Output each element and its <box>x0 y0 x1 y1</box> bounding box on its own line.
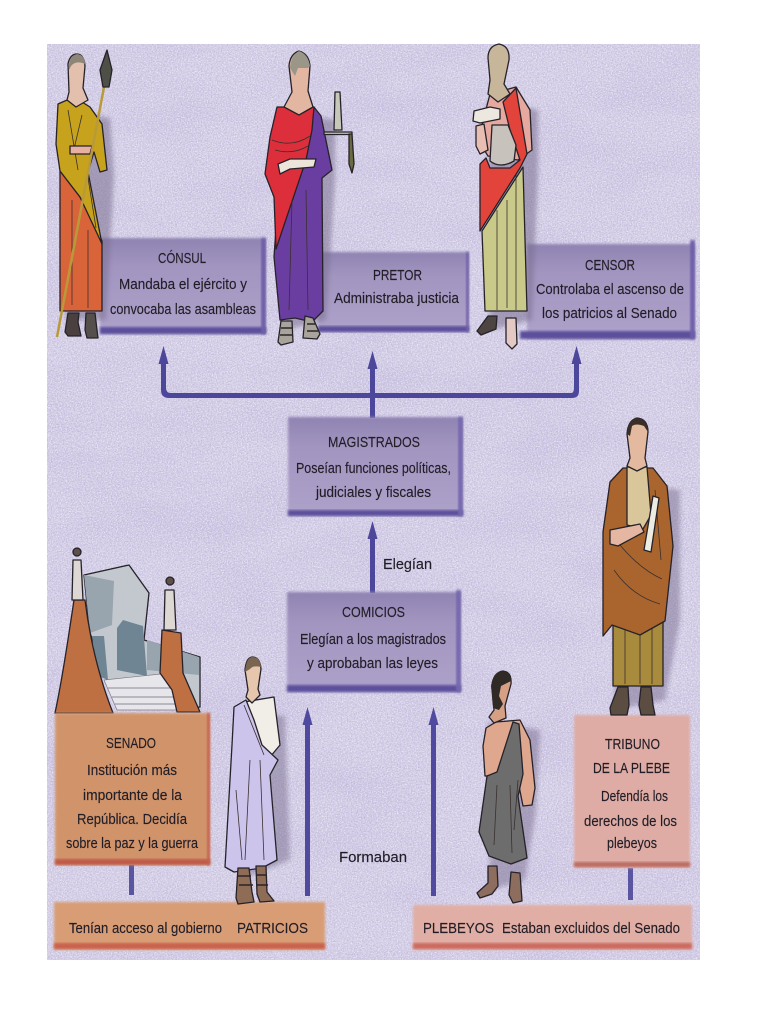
text: comicios: Elegían a los magistrados <box>300 631 446 648</box>
panel: patricios <box>54 902 325 950</box>
text: tribuno: DE LA PLEBE <box>593 760 670 777</box>
figure: cónsul <box>56 50 114 338</box>
panel: magistrados <box>288 417 463 516</box>
arrows: bracket from Magistrados to the three magistracies <box>158 346 582 418</box>
panel: plebeyos <box>413 905 692 950</box>
text: magistrados <box>296 434 451 501</box>
text: plebeyos <box>423 920 680 937</box>
text: patricios: Tenían acceso al gobierno <box>69 920 222 937</box>
text: magistrados: judiciales y fiscales <box>315 484 431 501</box>
text: senado <box>66 735 199 852</box>
text: senado: sobre la paz y la guerra <box>66 835 199 852</box>
text: tribuno <box>584 736 677 852</box>
text: pretor: Administraba justicia <box>334 290 460 307</box>
text: censor: CENSOR <box>585 257 635 274</box>
text: senado: Institución más <box>87 762 177 779</box>
text: pretor <box>334 267 460 307</box>
background panel <box>47 44 700 960</box>
figure: patricio <box>225 657 290 904</box>
text: magistrados: Poseían funciones políticas, <box>296 460 451 477</box>
text: comicios: COMICIOS <box>342 604 405 621</box>
panel: pretor <box>318 252 469 332</box>
panel: senado <box>55 713 210 865</box>
arrow: plebeyos to comicios <box>428 707 438 896</box>
connector: tribuno to plebeyos <box>628 868 633 900</box>
text: tribuno: plebeyos <box>607 835 657 852</box>
figure: censor <box>473 44 538 349</box>
arrow: Elegían <box>368 521 378 593</box>
text: cónsul: CÓNSUL <box>158 250 206 267</box>
text: tribuno: Defendía los <box>601 788 668 805</box>
text: plebeyos: Estaban excluidos del Senado <box>502 920 680 937</box>
text: tribuno: TRIBUNO <box>605 736 660 753</box>
label: Formaban: Formaban <box>339 849 407 866</box>
illustration: senate building <box>55 548 200 713</box>
text: senado: importante de la <box>83 787 183 804</box>
text: patricios: PATRICIOS <box>237 920 308 937</box>
text: senado: República. Decidía <box>77 811 188 828</box>
text: cónsul <box>110 250 256 318</box>
text: censor <box>536 257 684 322</box>
text: comicios: y aprobaban las leyes <box>307 655 438 672</box>
figure: tribuno <box>603 418 680 715</box>
text: cónsul: Mandaba el ejército y <box>119 276 247 293</box>
text: tribuno: derechos de los <box>584 813 677 830</box>
text: pretor: PRETOR <box>373 267 422 284</box>
text: comicios <box>300 604 446 672</box>
text: senado: SENADO <box>106 735 156 752</box>
panel: censor <box>520 240 695 339</box>
panel: tribuno de la plebe <box>574 715 690 868</box>
panel: cónsul <box>100 238 266 334</box>
text: cónsul: convocaba las asambleas <box>110 301 256 318</box>
panel: comicios <box>287 590 461 692</box>
arrow: patricios to comicios <box>302 707 312 896</box>
text: plebeyos: PLEBEYOS <box>423 920 494 937</box>
figure: pretor <box>265 51 354 345</box>
text: censor: los patricios al Senado <box>542 305 677 322</box>
text: magistrados: MAGISTRADOS <box>328 434 420 451</box>
label: Elegían: Elegían <box>383 556 432 573</box>
figure: plebeyo <box>477 671 540 903</box>
connector: senado to patricios <box>129 865 134 895</box>
text: censor: Controlaba el ascenso de <box>536 281 684 298</box>
